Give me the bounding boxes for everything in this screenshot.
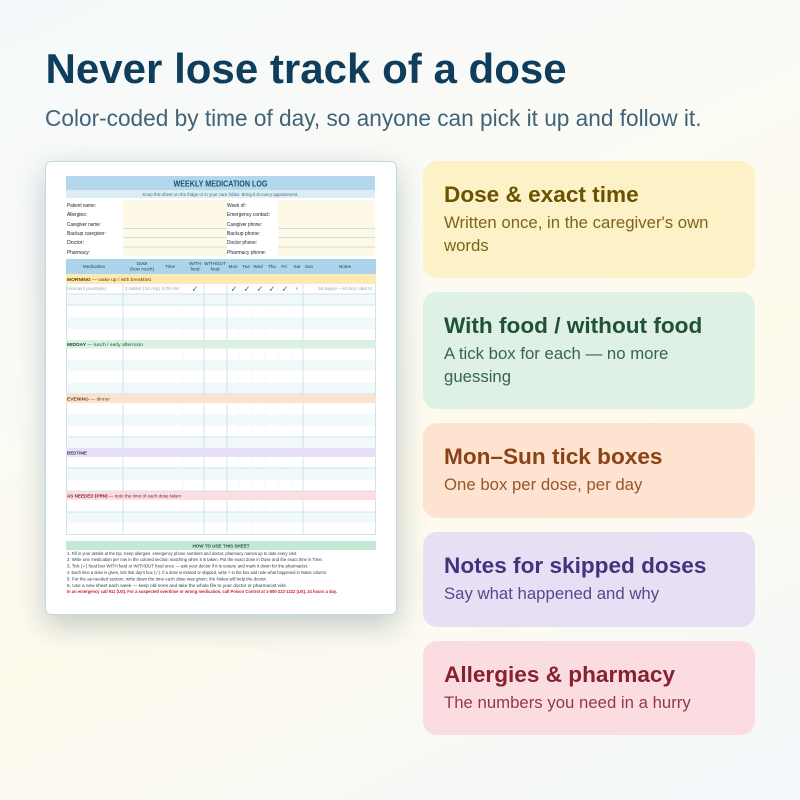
how to use this sheet: 3. Tick (✓) food box WITH food or WITHOUT food once — ask your doctor if it is unsure and mark it down for the pharmacist.	[67, 564, 308, 569]
patient details form: Pharmacy phone:	[227, 250, 266, 256]
patient details form: Backup caregiver:	[67, 231, 106, 237]
table header row: WITHOUT	[204, 261, 226, 266]
example row	[67, 284, 372, 294]
patient details form: Caregiver name:	[67, 222, 101, 228]
panel: mon-sun tick boxes	[423, 423, 755, 518]
heading: Mon–Sun tick boxes	[444, 444, 662, 469]
title: Never lose track of a dose	[46, 45, 567, 92]
example row: ×	[296, 286, 299, 291]
table header row: food	[191, 266, 200, 272]
morning band: MORNING — wake up / with breakfast	[67, 277, 152, 282]
table header row: Time	[165, 264, 175, 269]
table header row: Medication	[83, 264, 106, 269]
table header row: Mon	[229, 264, 238, 269]
table header row: Wed	[253, 264, 263, 269]
table header row: Dose	[137, 261, 148, 266]
description: The numbers you need in a hurry	[444, 693, 691, 712]
how to use this sheet: 1. Fill in your details at the top. Keep allergies, emergency phone numbers and doctor, pharmacy names up to date every visit.	[67, 551, 297, 556]
patient details form: Pharmacy:	[67, 250, 90, 256]
afternoon band: EVENING — dinner	[67, 397, 110, 402]
panel: dose and exact time	[423, 161, 755, 278]
how to use this sheet: HOW TO USE THIS SHEET	[192, 544, 250, 550]
morning band	[66, 274, 376, 284]
as needed band: AS NEEDED (PRN) — note the time of each dose taken	[67, 494, 181, 499]
example row: ✓	[282, 284, 288, 294]
sheet title band: WEEKLY MEDICATION LOG	[174, 180, 268, 188]
panel: notes for skipped doses	[423, 532, 755, 627]
how to use this sheet: 4. Each time a dose is given, tick that day's box (✓). If a dose is missed or skipped, write × in the box and note what happened in Notes column.	[67, 570, 327, 575]
table header row: Sun	[305, 264, 314, 269]
description: Written once, in the caregiver's own words	[444, 213, 708, 255]
example row: 1 tablet (10 mg)	[125, 286, 161, 291]
alternating row shading	[67, 294, 375, 523]
sheet title band	[66, 176, 375, 198]
description: Say what happened and why	[444, 584, 659, 603]
patient details form: Emergency contact:	[227, 212, 270, 218]
patient details form: Doctor:	[67, 240, 84, 246]
table header row: Notes	[339, 264, 352, 269]
table header row: Tue	[242, 264, 250, 269]
example row: Sat skipped — felt dizzy; called Dr	[318, 286, 372, 291]
how to use this sheet: 5. For the as-needed section, write down the time each dose was given; the Notes will help the doctor.	[67, 576, 267, 581]
patient details form: Backup phone:	[227, 231, 260, 237]
as needed band	[66, 492, 376, 500]
table header row: Fri	[281, 264, 287, 269]
heading: Allergies & pharmacy	[444, 662, 675, 687]
bedtime band: BEDTIME	[67, 450, 87, 456]
patient details form: Caregiver phone:	[227, 222, 262, 228]
table header row: food	[211, 266, 220, 272]
panel: allergies and pharmacy	[423, 641, 755, 735]
midday band	[66, 340, 376, 348]
patient details form	[67, 200, 375, 256]
subtitle: Color-coded by time of day, so anyone can pick it up and follow it.	[45, 105, 702, 131]
how to use this sheet: In an emergency call 911 (US). For a suspected overdose or wrong medication, call Poison Control at 1-800-222-1222 (US), 24 hours a day.	[67, 589, 337, 594]
table header row: Sat	[294, 264, 301, 269]
how to use this sheet: 6. Use a new sheet each week — keep old ones and take the whole file to your doctor or pharmacist visit.	[67, 583, 287, 588]
patient details form: Patient name:	[67, 203, 96, 209]
medication table	[66, 259, 376, 534]
how to use this sheet: 2. Write one medication per row in the colored section matching when it is taken. Put the exact dose in Dose and the exact time in Time.	[67, 557, 323, 562]
description: One box per dose, per day	[444, 475, 642, 494]
bedtime band	[66, 448, 376, 457]
panel: weekly medication log sheet	[45, 161, 397, 615]
example row: ✓	[269, 284, 275, 294]
example row: ✓	[231, 284, 237, 294]
afternoon band	[66, 394, 376, 403]
heading: Notes for skipped doses	[444, 553, 706, 578]
heading: Dose & exact time	[444, 182, 639, 207]
panel: with food / without food	[423, 292, 755, 409]
example row: ✓	[257, 284, 263, 294]
patient details form: Allergies:	[67, 212, 87, 218]
table header row	[66, 259, 376, 274]
how to use this sheet	[66, 541, 376, 594]
grid lines	[66, 274, 376, 534]
sheet title band: Keep this sheet on the fridge or in your care folder. Bring it to every appointment.	[142, 192, 298, 197]
patient details form: Week of:	[227, 203, 246, 209]
description: A tick box for each — no more guessing	[444, 344, 668, 386]
example row: ✓	[192, 284, 198, 294]
table header row: WITH	[189, 261, 201, 266]
example row: Lisinopril (example)	[67, 286, 107, 291]
table header row: (how much)	[130, 266, 154, 272]
example row: ✓	[244, 284, 250, 294]
patient details form: Doctor phone:	[227, 240, 257, 246]
heading: With food / without food	[444, 313, 702, 338]
example row: 8:00 AM	[162, 286, 179, 291]
midday band: MIDDAY — lunch / early afternoon	[67, 342, 143, 347]
table header row: Thu	[268, 264, 276, 269]
